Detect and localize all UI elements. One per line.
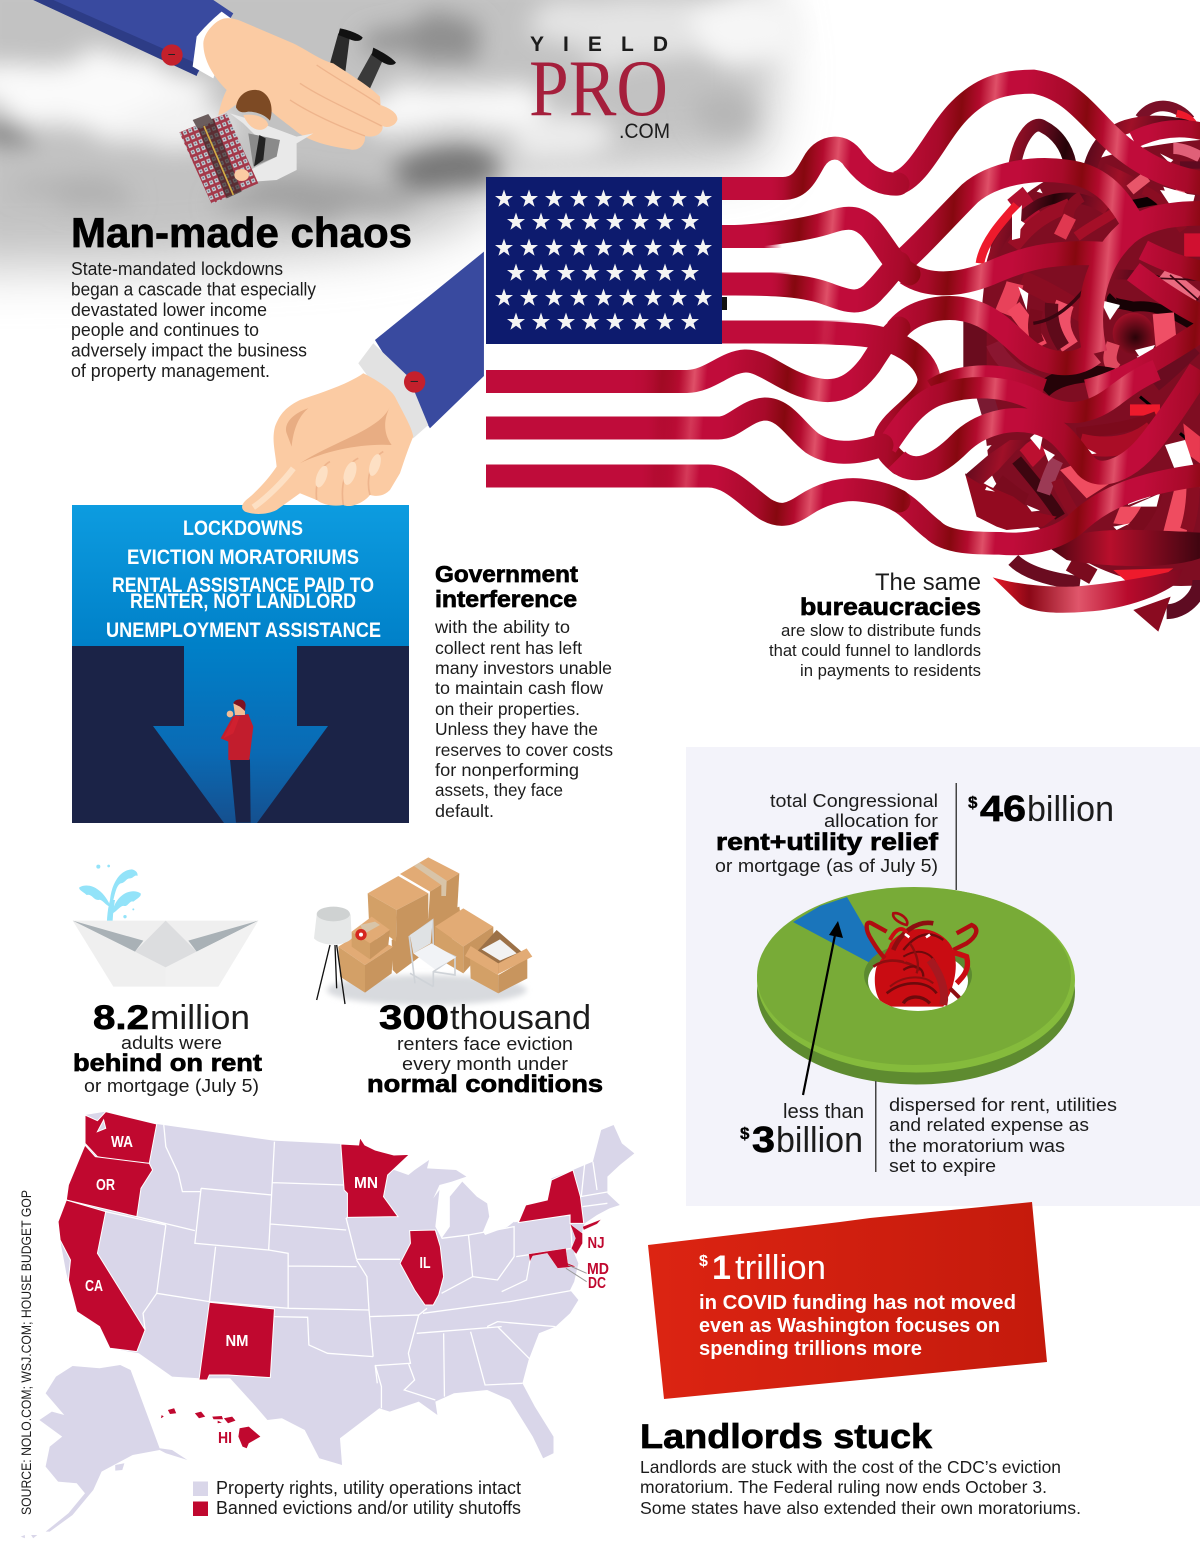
stripe: S4 behind [735,332,929,464]
right box [435,908,493,947]
box text: UNEMPLOYMENT ASSISTANCE [106,619,381,642]
DC and MD leader lines [566,1265,587,1282]
map labels: CA [85,1278,103,1295]
box text: RENTER, NOT LANDLORD [130,590,356,613]
$3 billion: 3 [752,1119,775,1160]
mini red tape tangle [867,913,976,1007]
logo: Yield Pro: YIELD [530,33,668,56]
text: government interference: Government [435,561,578,587]
icon: legs [330,28,396,90]
icon: lower sleeve [375,252,484,428]
intro text: people and continues to [71,320,259,340]
callout: 1 trillion red tape banner: even as Washington focuses on [699,1315,1000,1337]
text: 8.2 million stat [73,999,262,1096]
map labels: NM [226,1333,248,1350]
logo: Yield Pro: PRO [529,45,668,133]
icon: upper sleeve [33,0,233,78]
heading: landlords stuck: Landlords stuck [640,1418,932,1456]
lamp [317,945,345,1004]
dispersed label: the moratorium was [889,1136,1065,1156]
flag stripes: straight sections [486,177,852,488]
panel: red tape tangle [735,82,1200,632]
map labels [85,1134,609,1447]
map labels: NJ [588,1235,604,1252]
icon: thinking person [221,699,253,823]
Hawaii islands [161,1408,260,1448]
panel: funding pie [686,747,1200,1206]
map legend: Banned evictions and/or utility shutoffs [216,1497,521,1518]
text: the same bureaucracies: that could funnel to landlords [769,641,981,660]
intro text: of property management. [71,361,270,381]
icon: sinking paper boat [73,865,258,987]
map labels: DC [588,1275,606,1292]
text: 300 thousand stat: thousand [450,999,591,1037]
box text: EVICTION MORATORIUMS [127,546,359,569]
$3 billion [740,1101,864,1160]
$3 billion: billion [776,1119,863,1160]
text: 300 thousand stat [367,999,603,1098]
chair [409,920,455,987]
logo: Yield Pro: .COM [619,120,670,143]
water spout [79,865,141,940]
$3 billion: less than [783,1101,864,1123]
allocation label [715,791,939,876]
text: 300 thousand stat: 300 [379,999,449,1037]
flag union [486,177,727,344]
tangle front ribbons [897,82,1200,390]
callout: 1 trillion red tape banner [648,1202,1047,1399]
icon: apartment building [179,113,258,204]
box text: LOCKDOWNS [183,517,303,540]
text: the same bureaucracies: in payments to residents [800,661,981,680]
text: 8.2 million stat: million [150,999,250,1037]
pie chart [757,887,1075,1084]
arrow [153,646,328,823]
callout: 1 trillion red tape banner: trillion [735,1249,826,1287]
allocation label: allocation for [824,811,938,831]
left lower box [338,933,393,965]
text: the same bureaucracies: The same [875,569,981,596]
text: government interference: assets, they face [435,780,563,800]
map labels: IL [420,1255,431,1272]
dispersed label: set to expire [889,1156,996,1176]
stars [495,190,712,330]
lower 48 base [58,1112,634,1465]
text: government interference [434,561,613,821]
text: the same bureaucracies: are slow to distribute funds [781,621,981,640]
tangle back ribbons [975,106,1200,390]
text: government interference: on their properties. [435,699,580,719]
icon: moving boxes, lamp and chair [314,857,532,1005]
callout: 1 trillion red tape banner: 1 [712,1249,731,1287]
source note: SOURCE: NOLO.COM; WSJ.COM; HOUSE BUDGET GOP [19,1190,34,1515]
box text: RENTAL ASSISTANCE PAID TO [112,574,374,597]
$46 billion: $ [968,793,978,812]
map labels: MN [354,1175,378,1192]
text: the same bureaucracies [769,569,981,680]
map legend [193,1477,521,1518]
title: Man-made chaos [71,209,412,256]
panel: policy box with arrow [72,505,409,823]
icon: upper hand [203,18,397,150]
intro text: State-mandated lockdowns [71,259,283,279]
text: landlords body: Landlords are stuck with the cost of the CDC’s eviction [640,1457,1061,1477]
smoke clouds [0,0,795,268]
tangle extra white gaps [1012,190,1195,505]
callout: 1 trillion red tape banner: spending trillions more [699,1338,922,1360]
icon: man's shirt and tie [230,90,313,182]
text: 8.2 million stat: behind on rent [73,1050,262,1077]
illustration: upper hand crushing man with building [33,0,397,204]
icon: pointing hand [242,373,413,514]
dispersed label [889,1095,1117,1176]
text: 8.2 million stat: adults were [121,1033,222,1053]
Alaska [21,1365,187,1538]
text: government interference: for nonperforming [435,760,579,780]
intro text: adversely impact the business [71,340,307,360]
dispersed label: and related expense as [889,1115,1089,1135]
tangle base mass [981,140,1200,586]
$46 billion: billion [1027,788,1114,829]
open box [471,930,527,973]
text: landlords body: Some states have also extended their own moratoriums. [640,1498,1081,1518]
text: 300 thousand stat: every month under [402,1054,568,1074]
map labels: MD [587,1261,609,1278]
dispersed label: dispersed for rent, utilities [889,1095,1117,1115]
icon: shirt cuff [358,343,428,438]
box text [106,517,381,642]
text: the same bureaucracies: bureaucracies [800,594,981,621]
text: government interference: default. [435,801,494,821]
$3 billion: $ [740,1124,750,1143]
$46 billion [968,788,1114,829]
icon: cuff button [404,371,425,393]
big center box [368,876,428,910]
text: 8.2 million stat: or mortgage (July 5) [84,1076,259,1096]
text: 300 thousand stat: renters face eviction [397,1034,573,1054]
middle lower box [392,907,463,974]
intro text: began a cascade that especially [71,280,316,300]
callout: 1 trillion red tape banner: $ [699,1253,708,1270]
flag stripes turning into red tape [499,148,909,514]
allocation label: or mortgage (as of July 5) [715,856,938,876]
small box [352,917,390,943]
state borders [106,1125,609,1408]
allocation label: rent+utility relief [716,829,939,856]
text: landlords body: moratorium. The Federal ruling now ends October 3. [640,1477,1047,1497]
text: government interference: to maintain cash flow [435,678,603,698]
map: US states [21,1112,634,1538]
text: government interference: many investors unable [435,658,612,678]
back right box [400,857,459,892]
callout: 1 trillion red tape banner: in COVID funding has not moved [699,1292,1016,1314]
allocation label: total Congressional [770,791,938,811]
text: government interference: reserves to cover costs [435,740,613,760]
banned states [58,1112,601,1380]
text: landlords body [640,1457,1081,1518]
text: government interference: interference [435,586,577,612]
text: 8.2 million stat: 8.2 [93,999,149,1037]
text: 300 thousand stat: normal conditions [367,1071,603,1098]
map labels: OR [96,1177,115,1194]
illustration: lower hand and sleeve [242,252,484,514]
tangle white gaps [1015,153,1187,363]
intro text: devastated lower income [71,300,267,320]
intro text [71,259,316,381]
map labels: HI [218,1430,232,1447]
map labels: WA [111,1134,133,1151]
text: government interference: Unless they have the [435,719,598,739]
text: government interference: with the ability to [434,617,570,637]
arrow [803,921,843,1095]
text: government interference: collect rent has left [435,638,582,658]
$46 billion: 46 [980,788,1026,829]
map legend: Property rights, utility operations intact [216,1477,521,1498]
